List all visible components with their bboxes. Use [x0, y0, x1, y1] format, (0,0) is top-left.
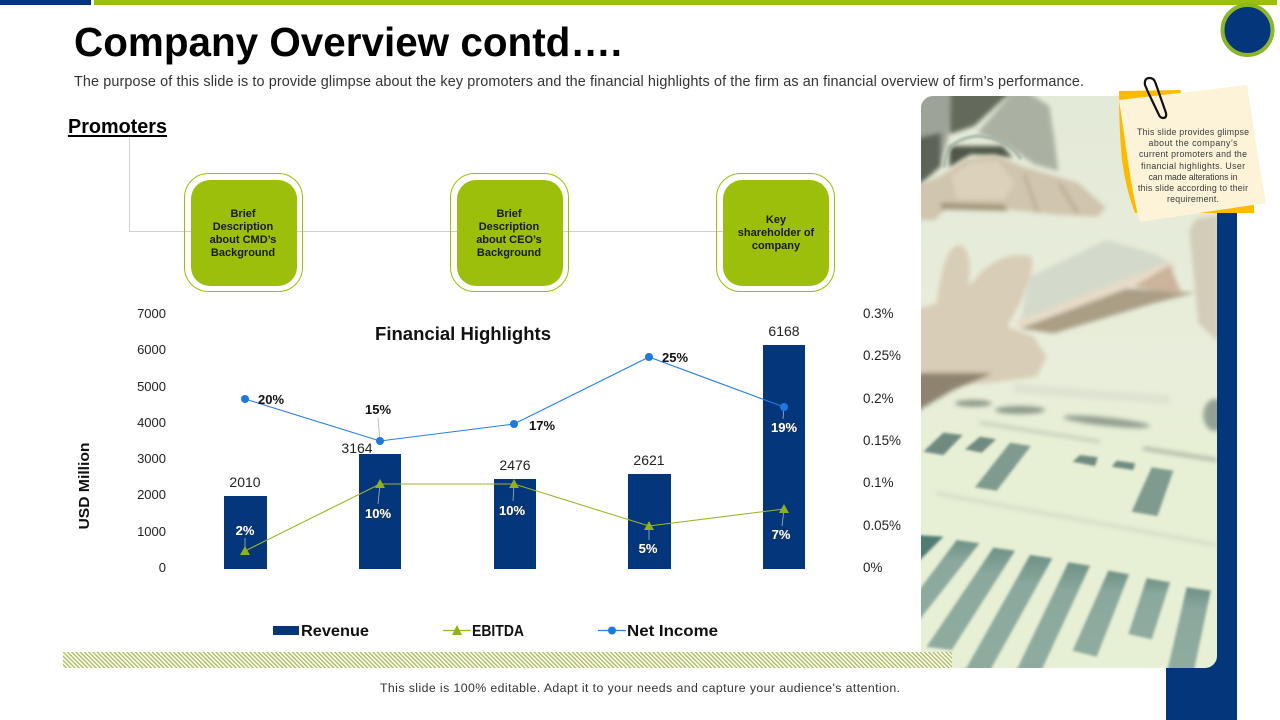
white percentage labels: 2% [236, 523, 255, 538]
footer text: This slide is 100% editable. Adapt it to your needs and capture your audience's attention. [380, 681, 900, 695]
promoter card: CEO: Background [477, 247, 541, 259]
revenue bars [224, 345, 805, 569]
note text: about the company’s [1148, 138, 1238, 148]
left axis labels: 6000 [137, 342, 166, 357]
note text: current promoters and the [1139, 149, 1247, 159]
label leader lines [245, 407, 784, 551]
legend: Net Income [627, 623, 718, 640]
left axis labels: 7000 [137, 306, 166, 321]
right axis labels: 0.05% [863, 518, 901, 533]
revenue value labels [229, 323, 800, 490]
promoter card: CMD: Brief [230, 208, 256, 220]
promoter card: key shareholder: Key [766, 214, 787, 226]
white percentage labels: 5% [639, 541, 658, 556]
ebitda line [240, 479, 789, 555]
net income percentage labels [258, 350, 688, 433]
promoter card: key shareholder [716, 174, 834, 292]
icon: paperclip [1145, 78, 1166, 118]
left axis labels: 0 [159, 560, 166, 575]
left axis labels: 3000 [137, 451, 166, 466]
revenue value labels: 6168 [768, 323, 800, 339]
revenue value labels: 2010 [229, 474, 261, 490]
promoter card: CEO [450, 174, 568, 292]
promoter card: CMD: about CMD’s [210, 234, 276, 246]
promoter card: CMD: Background [211, 247, 275, 259]
left axis labels: 4000 [137, 415, 166, 430]
left axis labels: 5000 [137, 379, 166, 394]
right axis labels [863, 306, 901, 575]
legend: EBITDA [472, 623, 524, 640]
promoter card: CEO: Brief [496, 208, 522, 220]
navy side column [1166, 200, 1237, 720]
right axis labels: 0.15% [863, 433, 901, 448]
left axis labels: 1000 [137, 524, 166, 539]
right axis labels: 0.1% [863, 475, 894, 490]
right axis labels: 0% [863, 560, 882, 575]
connector lines [130, 137, 830, 232]
note paper [1119, 85, 1266, 222]
sticky note [1119, 78, 1266, 222]
chart title: Financial Highlights [375, 324, 551, 344]
legend [273, 623, 718, 640]
note text: requirement. [1167, 194, 1219, 204]
revenue value labels: 2621 [633, 452, 665, 468]
top accent bar: green [94, 0, 1277, 5]
promoter card: key shareholder: shareholder of [738, 227, 815, 239]
note text: This slide provides glimpse [1137, 127, 1249, 137]
net income percentage labels: 15% [365, 402, 391, 417]
revenue value labels: 3164 [341, 440, 373, 456]
net income percentage labels: 17% [529, 418, 555, 433]
white percentage labels: 7% [772, 527, 791, 542]
promoter card: CMD: Description [213, 221, 274, 233]
net income percentage labels: 20% [258, 392, 284, 407]
note text: this slide according to their [1138, 183, 1248, 193]
right axis labels: 0.3% [863, 306, 894, 321]
photo: hands on financial report [911, 86, 1227, 673]
left axis title: USD Million [76, 442, 93, 530]
white percentage labels: 10% [365, 506, 391, 521]
financial highlights chart [76, 306, 901, 640]
subtitle text: The purpose of this slide is to provide glimpse about the key promoters and the financial highlights of the firm as an financial overview of firm’s performance. [74, 74, 1084, 90]
white percentage labels: 10% [499, 503, 525, 518]
revenue value labels: 2476 [499, 457, 531, 473]
promoter card: CMD [184, 174, 302, 292]
note text [1137, 127, 1249, 204]
top accent bar: navy [0, 0, 91, 5]
legend: Revenue [301, 623, 369, 640]
net income percentage labels: 25% [662, 350, 688, 365]
promoter card: CEO: about CEO’s [476, 234, 542, 246]
white percentage labels [236, 420, 797, 556]
note text: financial highlights. User [1141, 161, 1245, 171]
title: Company Overview contd…. [74, 19, 622, 65]
white percentage labels: 19% [771, 420, 797, 435]
left axis labels: 2000 [137, 487, 166, 502]
right axis labels: 0.25% [863, 348, 901, 363]
promoter card: key shareholder: company [752, 240, 801, 252]
net income line [241, 353, 788, 445]
hatched band [63, 652, 952, 668]
promoters heading: Promoters [68, 116, 167, 138]
note backing: yellow [1119, 90, 1254, 213]
left axis labels [137, 306, 166, 575]
right axis labels: 0.2% [863, 391, 894, 406]
promoter card: CEO: Description [479, 221, 540, 233]
note text: can made alterations in [1148, 172, 1238, 182]
corner circle badge [1222, 5, 1272, 55]
